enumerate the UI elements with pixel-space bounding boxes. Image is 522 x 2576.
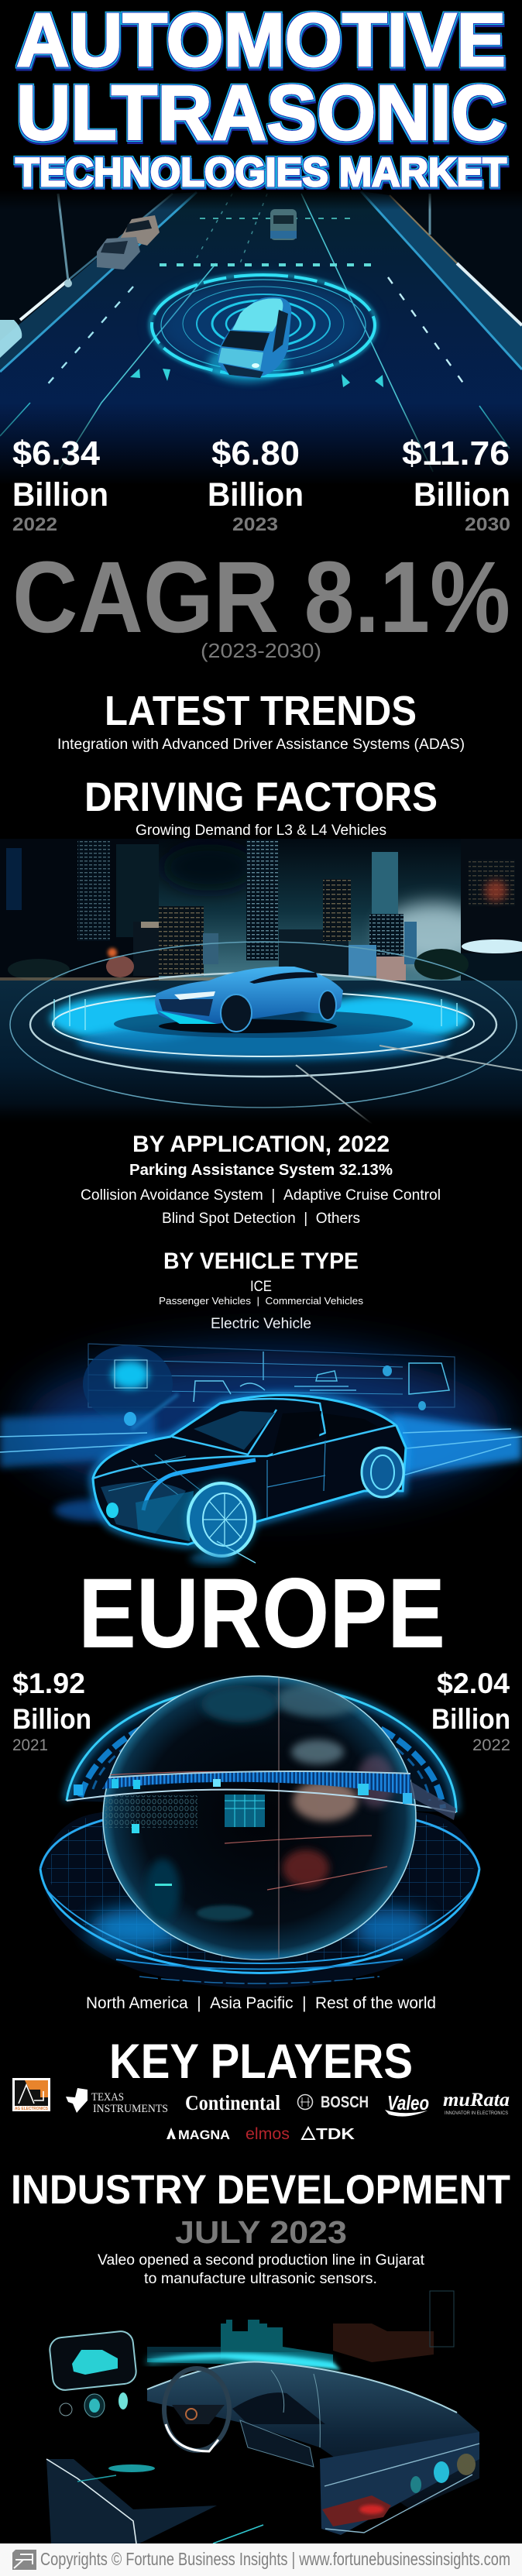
icon: main car: [208, 297, 291, 383]
stat: Europe 2021: [12, 1668, 91, 1754]
light streaks: [0, 1365, 522, 1521]
stat: 2022: [12, 434, 108, 535]
text: electric vehicle: Electric Vehicle: [211, 1316, 311, 1332]
logo: Bosch: BOSCH: [321, 2093, 369, 2111]
heading: latest trends: LATEST TRENDS: [105, 688, 417, 734]
title: AUTOMOTIVE: [16, 0, 506, 82]
sphere continents: [105, 1676, 416, 1980]
holographic skyline: [147, 2291, 454, 2370]
text: other regions: North America | Asia Pacific | Rest of the world: [86, 1994, 436, 2012]
logo: TDK: TDK: [316, 2126, 355, 2143]
icon: far car: [270, 209, 297, 240]
stat: Europe 2022: Billion: [431, 1703, 510, 1735]
logo: Texas Instruments: TEXAS: [91, 2091, 124, 2104]
logo: Continental: Continental: [185, 2091, 280, 2114]
heading: by vehicle type: BY VEHICLE TYPE: [163, 1249, 359, 1274]
stat: 2030: 2030: [465, 514, 510, 535]
text: latest trend: Integration with Advanced Driver Assistance Systems (ADAS): [57, 737, 465, 753]
screen: [49, 2330, 137, 2417]
icon: wire car: [93, 1395, 406, 1564]
logo: Murata: muRata: [443, 2090, 510, 2111]
glowing rings: [10, 942, 522, 1124]
icon: parked white car: [120, 215, 160, 246]
date: JULY 2023: [175, 2214, 347, 2250]
heading: key players: KEY PLAYERS: [109, 2035, 413, 2089]
icon: parked grey car: [97, 237, 140, 270]
logo: Murata: INNOVATOR IN ELECTRONICS: [445, 2111, 508, 2116]
logo: AG Electronics: AG ELECTRONICS: [15, 2107, 49, 2111]
icon: scanner rings: [150, 274, 376, 376]
heading: by application: BY APPLICATION, 2022: [132, 1132, 390, 1157]
logo: Fortune Business Insights: [12, 2550, 36, 2570]
heading: driving factors: DRIVING FACTORS: [84, 775, 438, 820]
stat: Europe 2021: 2021: [12, 1736, 48, 1754]
icons: lane arrows: [130, 369, 383, 387]
logo: AG Electronics: [12, 2078, 50, 2111]
text: leading application: Parking Assistance System 32.13%: [129, 1162, 393, 1179]
dashboard: [147, 2361, 479, 2509]
stat: 2030: $11.76: [402, 434, 510, 472]
text: development line 1: Valeo opened a second production line in Gujarat: [98, 2252, 425, 2269]
holographic panel: [83, 1344, 455, 1423]
footer bar: [0, 2543, 522, 2576]
stat: 2022: Billion: [12, 476, 108, 513]
globe image: [40, 1676, 479, 1989]
stat: Europe 2022: 2022: [472, 1736, 510, 1754]
logo: Texas Instruments: INSTRUMENTS: [93, 2103, 168, 2115]
stat: Europe 2021: Billion: [12, 1703, 91, 1735]
equator band: [67, 1771, 456, 1820]
text: development line 2: to manufacture ultrasonic sensors.: [144, 2271, 377, 2287]
stat: 2023: [208, 434, 304, 535]
logo: Elmos: elmos: [246, 2125, 290, 2143]
bowl: [40, 1812, 479, 1989]
outer shell: [67, 1685, 456, 1812]
stat: Europe 2021: $1.92: [12, 1668, 85, 1699]
logo: Magna: MAGNA: [178, 2128, 230, 2142]
text: application segments 1: Collision Avoidance System | Adaptive Cruise Control: [81, 1187, 441, 1204]
seat: [46, 2459, 263, 2543]
CAGR period: (2023-2030): [201, 639, 321, 662]
right console: [320, 2432, 479, 2535]
text: application segments 2: Blind Spot Detection | Others: [162, 1211, 360, 1227]
stat: 2030: Billion: [414, 476, 510, 513]
logo: TDK: [302, 2126, 355, 2143]
stat: 2023: $6.80: [211, 434, 300, 472]
icon: cut-off car: [0, 320, 22, 358]
title: [15, 0, 507, 195]
heading: Europe: EUROPE: [78, 1558, 445, 1669]
text: ICE sub-segments: Passenger Vehicles | Commercial Vehicles: [159, 1295, 364, 1307]
stat: Europe 2022: $2.04: [437, 1668, 510, 1699]
icon: city car: [155, 967, 343, 1033]
city ground: [0, 981, 522, 1124]
stat: 2023: 2023: [232, 514, 278, 535]
hero image: road with scanning car: [0, 190, 522, 485]
city image: blue car on glowing rings: [0, 839, 522, 1124]
logo: Valeo: Valeo: [387, 2091, 429, 2114]
logo: Bosch: [297, 2093, 369, 2111]
text: driving factor: Growing Demand for L3 & L4 Vehicles: [136, 823, 386, 839]
wireframe car image: [0, 1344, 522, 1564]
steering wheel: [164, 2368, 229, 2451]
stat: Europe 2022: [431, 1668, 510, 1754]
stat: 2030: [402, 434, 510, 535]
title: TECHNOLOGIES MARKET: [15, 150, 507, 195]
logo: Texas Instruments: [66, 2088, 168, 2115]
text: ICE: ICE: [250, 1279, 272, 1295]
stat: 2022: $6.34: [12, 434, 101, 472]
interior image: holographic dashboard: [46, 2291, 479, 2543]
title: ULTRASONIC: [16, 70, 506, 156]
sphere: [103, 1676, 416, 1959]
stat: 2023: Billion: [208, 476, 304, 513]
stat: 2022: 2022: [12, 514, 57, 535]
